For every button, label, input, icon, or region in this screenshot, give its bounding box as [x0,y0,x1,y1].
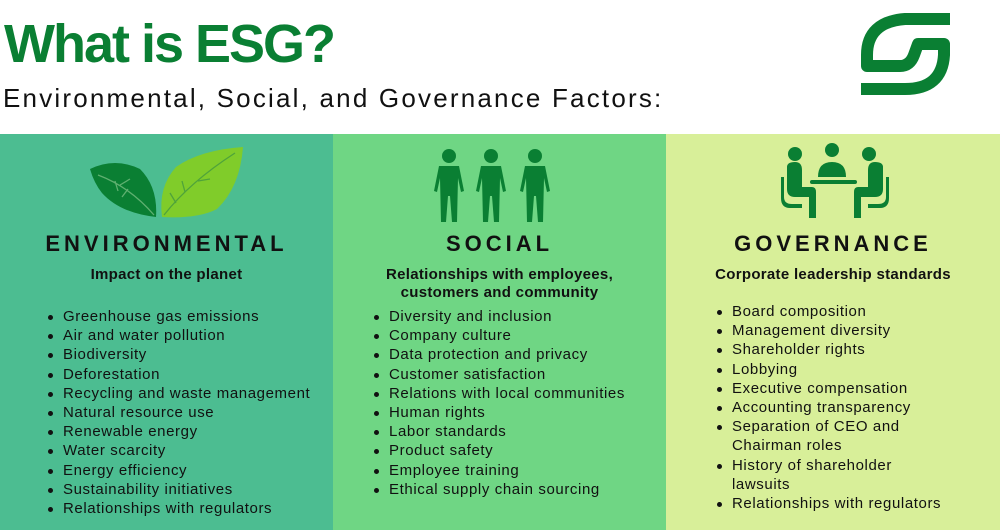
list: governance factors: Board composition [732,303,866,320]
list: governance factors: Shareholder rights [732,341,865,358]
panel: governance [666,134,1000,530]
list: environmental factors: Deforestation [63,366,160,383]
list: governance factors: Lobbying [732,361,798,378]
subheading: Corporate leadership standards [715,266,951,283]
list: social factors: Relations with local communities [389,385,625,402]
subheading: Impact on the planet [91,266,242,283]
list: governance factors: Separation of CEO and [732,418,900,435]
list: governance factors: Accounting transparency [732,399,911,416]
list: environmental factors [48,308,310,517]
list: environmental factors: Air and water pollution [63,327,225,344]
list: governance factors: Relationships with regulators [732,495,941,512]
heading: governance: GOVERNANCE [734,231,932,256]
list: environmental factors: Sustainability initiatives [63,481,233,498]
list: social factors: Labor standards [389,423,506,440]
panel: social [333,134,666,530]
logo [861,13,950,95]
panel: environmental [0,134,333,530]
list: social factors: Human rights [389,404,485,421]
list: environmental factors: Biodiversity [63,346,147,363]
list: environmental factors: Renewable energy [63,423,198,440]
list: environmental factors: Relationships with regulators [63,500,272,517]
subtitle: Environmental, Social, and Governance Factors: [3,83,663,113]
list: governance factors: Chairman roles [732,437,842,454]
list: social factors: Diversity and inclusion [389,308,552,325]
list: social factors: Company culture [389,327,511,344]
list: governance factors: lawsuits [732,476,790,493]
list: environmental factors: Energy efficiency [63,462,187,479]
list: governance factors: Executive compensation [732,380,908,397]
list: social factors: Data protection and privacy [389,346,588,363]
list: social factors: Customer satisfaction [389,366,546,383]
list: environmental factors: Natural resource use [63,404,214,421]
icon: leaves [90,147,243,218]
list: governance factors: Management diversity [732,322,891,339]
list: governance factors: History of shareholder [732,457,892,474]
subheading [386,266,613,301]
list: governance factors [717,303,941,512]
subheading: customers and community [401,284,598,301]
subheading: Relationships with employees, [386,266,613,283]
list: social factors: Employee training [389,462,519,479]
list: social factors: Ethical supply chain sourcing [389,481,600,498]
heading: environmental: ENVIRONMENTAL [45,231,288,256]
heading: social: SOCIAL [446,231,553,256]
icon: people [434,149,550,222]
list: social factors [374,308,625,498]
list: environmental factors: Recycling and waste management [63,385,310,402]
list: environmental factors: Greenhouse gas emissions [63,308,259,325]
icon: meeting [781,143,889,218]
list: social factors: Product safety [389,442,493,459]
list: environmental factors: Water scarcity [63,442,166,459]
title: What is ESG? [4,14,334,74]
